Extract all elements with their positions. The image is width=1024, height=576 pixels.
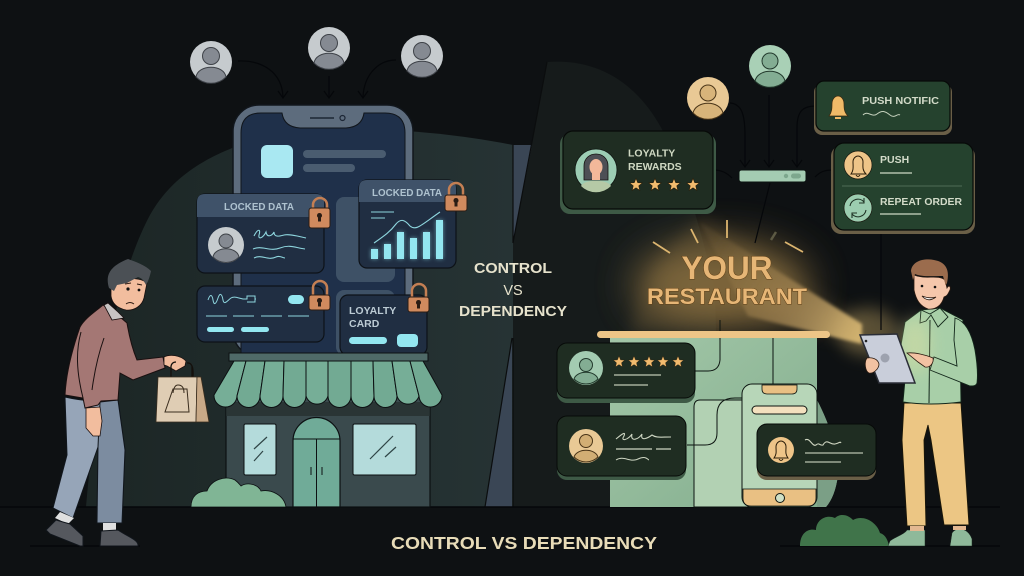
trousers xyxy=(902,403,969,526)
avatar: green xyxy=(749,45,791,87)
icon: padlock chart xyxy=(445,183,467,211)
window right xyxy=(353,424,416,475)
connector lines to router xyxy=(713,95,881,330)
tablet glow xyxy=(899,317,931,373)
stars xyxy=(613,356,684,367)
your restaurant heading: YOUR xyxy=(682,250,772,286)
stars xyxy=(630,178,699,190)
shoes xyxy=(46,520,138,546)
hand on hip xyxy=(86,407,102,436)
glow and beam xyxy=(630,217,898,356)
ground xyxy=(0,507,1024,576)
icon: bell xyxy=(829,96,848,116)
collar xyxy=(920,308,948,327)
shirt sleeve xyxy=(930,318,977,386)
slate wedge lower xyxy=(485,338,512,507)
person right: happy owner xyxy=(860,259,977,546)
heading: locked data: LOCKED DATA xyxy=(372,188,442,199)
divider strokes xyxy=(485,62,547,507)
your restaurant heading: RESTAURANT xyxy=(647,284,808,309)
awning xyxy=(214,361,442,408)
title: CONTROL VS DEPENDENCY xyxy=(391,533,657,553)
left backdrop blob xyxy=(86,129,513,507)
hands xyxy=(907,353,933,367)
ankles xyxy=(910,526,966,531)
center label xyxy=(459,261,567,320)
card: locked data profile xyxy=(197,194,324,273)
your restaurant heading xyxy=(647,250,808,309)
sweater xyxy=(65,305,165,408)
right bush xyxy=(800,515,889,546)
shirt placket xyxy=(929,320,930,403)
center label: CONTROL xyxy=(474,261,552,277)
heading: locked data: LOCKED DATA xyxy=(224,202,294,213)
phone xyxy=(233,105,413,357)
card: reviews xyxy=(557,343,695,403)
avatar: customer left xyxy=(190,41,232,83)
text: repeat order: REPEAT ORDER xyxy=(880,196,962,208)
avatar: tan xyxy=(687,77,729,119)
shirt body xyxy=(901,308,963,404)
connector arrows to phone xyxy=(238,60,396,98)
avatar: customer middle xyxy=(308,27,350,69)
icon: shopping bag xyxy=(156,362,209,422)
card: locked data chart xyxy=(359,180,456,268)
card: loyalty card xyxy=(340,295,427,355)
socks xyxy=(55,512,116,531)
right phone xyxy=(742,384,817,507)
door xyxy=(293,418,340,507)
right restaurant building xyxy=(597,320,838,507)
text: loyalty card: CARD xyxy=(349,318,380,330)
card: handwritten note xyxy=(557,416,686,480)
shoes xyxy=(888,530,925,546)
text: loyalty card: LOYALTY xyxy=(349,305,396,317)
slate wedge upper xyxy=(513,145,532,243)
card: wave data xyxy=(197,286,324,342)
tablet xyxy=(860,334,915,383)
faint ray xyxy=(771,232,776,240)
text: push: PUSH xyxy=(880,154,909,166)
icon: padlock loyalty card xyxy=(408,284,429,312)
text: loyalty rewards: LOYALTY xyxy=(628,148,675,160)
text: loyalty rewards: REWARDS xyxy=(628,161,682,173)
hand xyxy=(164,355,186,371)
storefront xyxy=(191,353,442,507)
rays xyxy=(653,220,803,253)
card: push notific xyxy=(814,81,952,135)
card: loyalty rewards xyxy=(560,131,716,214)
avatar: customer right xyxy=(401,35,443,77)
person left: sad customer xyxy=(46,259,209,546)
icon: padlock wave card xyxy=(309,281,330,310)
head xyxy=(111,278,147,310)
text: push notific: PUSH NOTIFIC xyxy=(862,95,939,107)
router bar xyxy=(739,170,806,182)
center label: VS xyxy=(503,283,523,299)
bush xyxy=(191,478,286,507)
trousers xyxy=(53,397,125,523)
right backdrop blob xyxy=(513,62,720,507)
window left xyxy=(244,424,276,475)
icon: padlock profile xyxy=(309,198,330,228)
card: push and repeat order xyxy=(831,143,975,234)
head xyxy=(914,275,950,309)
collar xyxy=(104,303,124,320)
center label: DEPENDENCY xyxy=(459,304,567,320)
card: notification xyxy=(757,424,876,480)
